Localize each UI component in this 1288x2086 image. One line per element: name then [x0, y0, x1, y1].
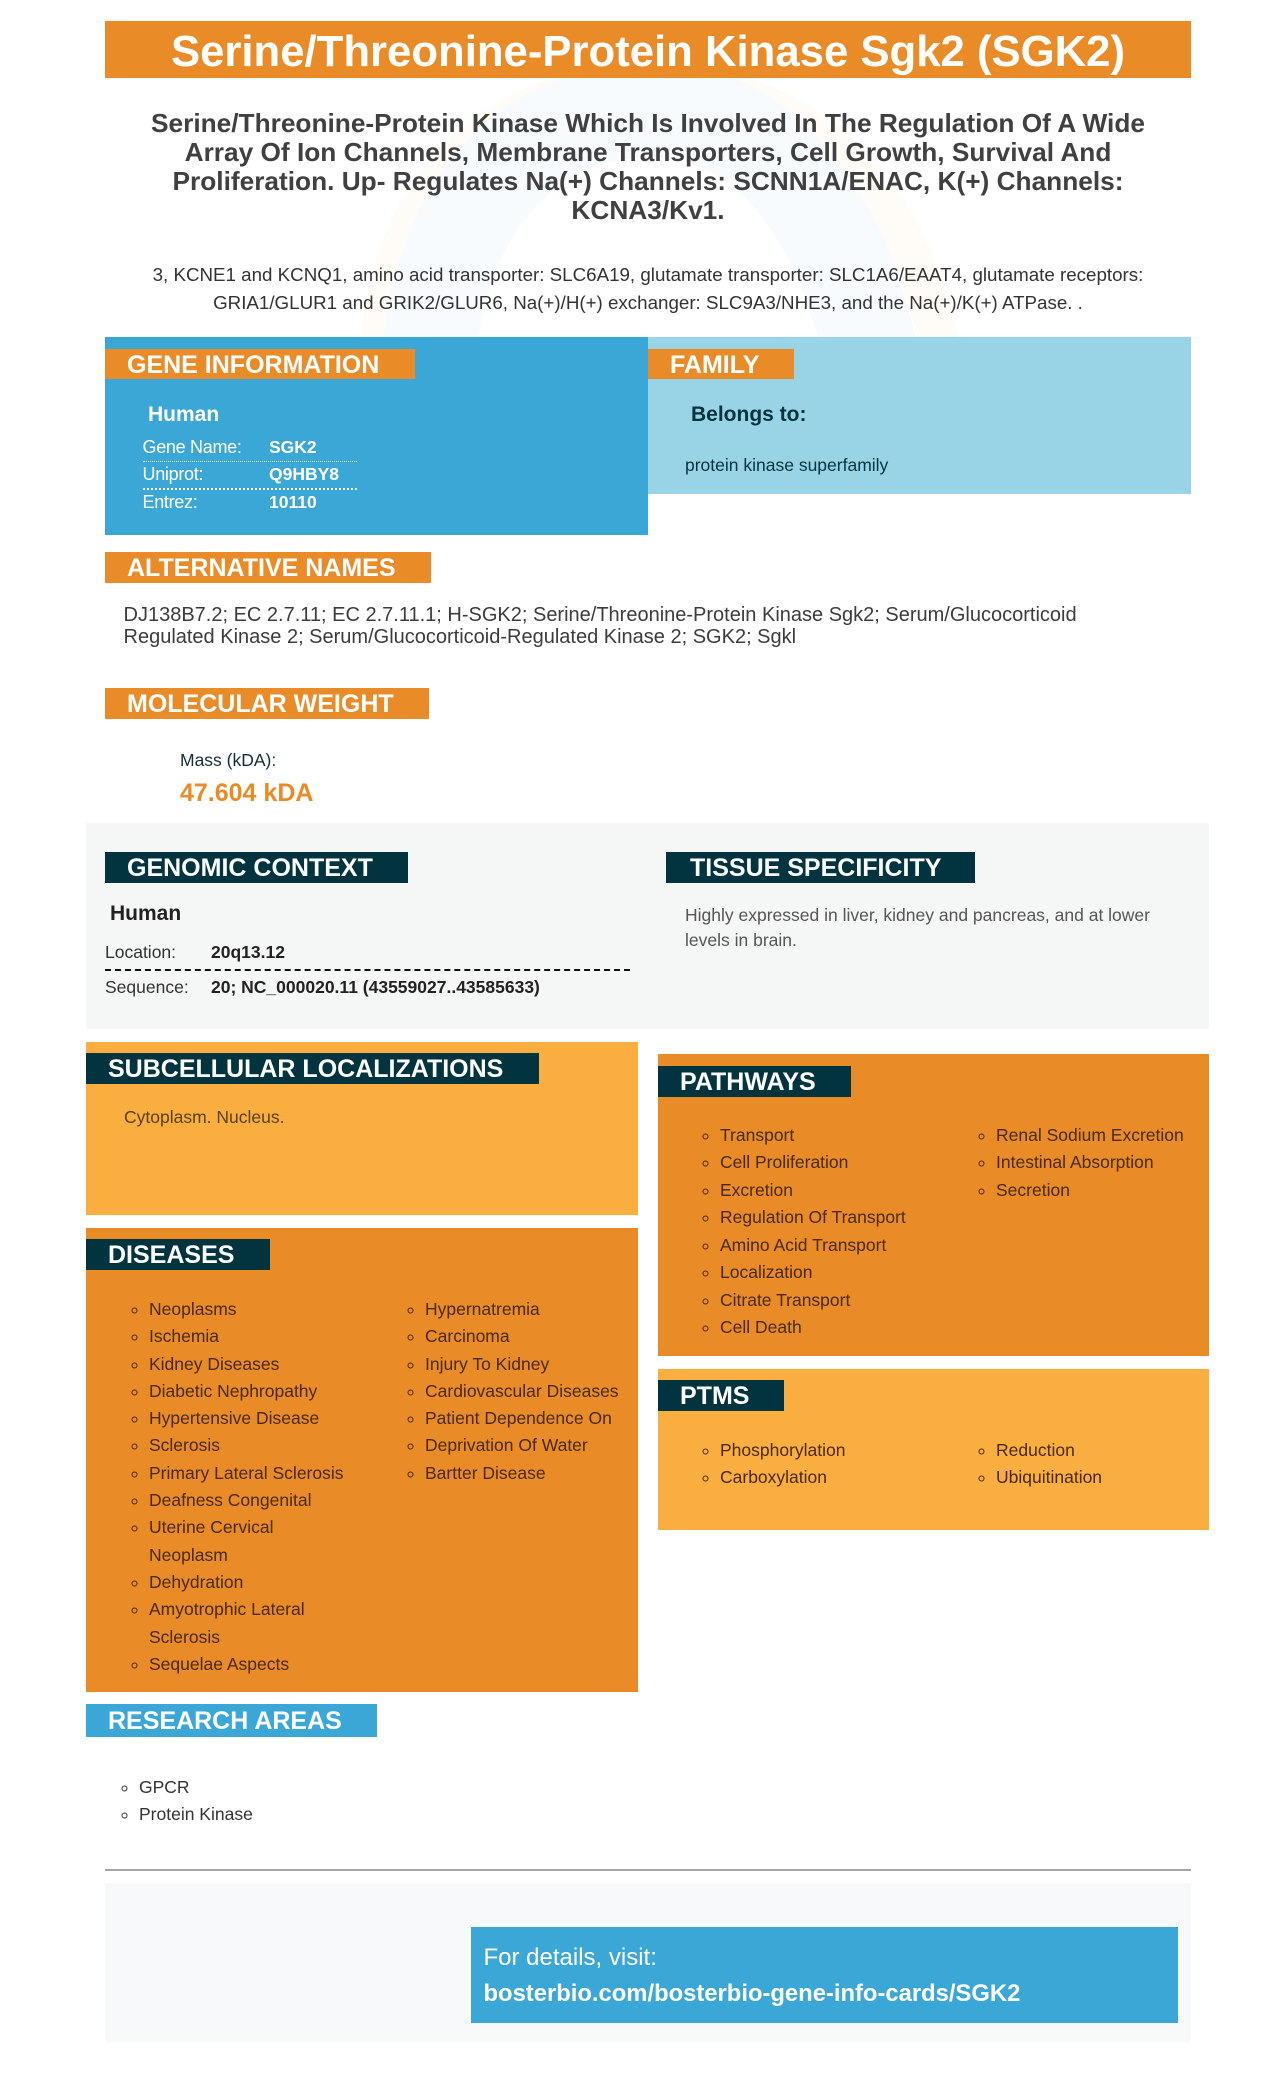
panel: subcellular localizations — [86, 1042, 638, 1215]
pathway list right: Renal Sodium Excretion — [996, 1124, 1184, 1144]
subtitle — [151, 108, 1145, 225]
watermark logo — [340, 70, 980, 350]
heading: alternative names: ALTERNATIVE NAMES — [127, 554, 396, 582]
description: 3, KCNE1 and KCNQ1, amino acid transporter: SLC6A19, glutamate transporter: SLC1A6/EAAT4, glutamate receptors: — [153, 264, 1143, 285]
gene table: SGK2 — [269, 437, 317, 457]
disease list right: Cardiovascular Diseases — [425, 1381, 619, 1401]
disease list right: Deprivation Of Water — [425, 1435, 588, 1455]
location row: Location: — [105, 942, 176, 962]
disease list right: Carcinoma — [425, 1326, 510, 1346]
panel: family — [648, 337, 1191, 494]
ptm list right: Reduction — [996, 1440, 1075, 1460]
alternative names text: DJ138B7.2; EC 2.7.11; EC 2.7.11.1; H-SGK2; Serine/Threonine-Protein Kinase Sgk2; Serum/Glucocorticoid — [124, 604, 1077, 626]
disease list left: Deafness Congenital — [149, 1490, 311, 1510]
disease list left: Sequelae Aspects — [149, 1654, 289, 1674]
ptm list left — [702, 1440, 846, 1487]
pathway list left: Regulation Of Transport — [720, 1207, 906, 1227]
disease list left: Dehydration — [149, 1572, 243, 1592]
alternative names text — [124, 604, 1077, 648]
pathway list right: Intestinal Absorption — [996, 1152, 1154, 1172]
pathway list left — [702, 1124, 906, 1337]
belongs to: Belongs to: — [691, 403, 806, 426]
subtitle: Array Of Ion Channels, Membrane Transporters, Cell Growth, Survival And — [185, 137, 1111, 167]
disease list right: Bartter Disease — [425, 1463, 546, 1483]
disease list left — [132, 1299, 344, 1674]
heading: tissue specificity: TISSUE SPECIFICITY — [690, 854, 941, 882]
panel: genomic context and tissue specificity: 20q13.12 — [211, 942, 285, 962]
alternative names text: Regulated Kinase 2; Serum/Glucocorticoid-Regulated Kinase 2; SGK2; Sgkl — [124, 626, 796, 648]
gene table: Uniprot: — [142, 464, 203, 484]
mass value: 47.604 kDA — [180, 778, 313, 806]
panel: ptms — [658, 1369, 1209, 1530]
panel: genomic context and tissue specificity — [86, 823, 1209, 1029]
title: Serine/Threonine-Protein Kinase Sgk2 (SGK2) — [171, 27, 1125, 76]
pathway list right — [978, 1124, 1184, 1200]
heading: research areas: RESEARCH AREAS — [108, 1707, 342, 1735]
heading: ptms: PTMS — [680, 1382, 749, 1410]
disease list right: Injury To Kidney — [425, 1354, 549, 1374]
heading: research areas — [86, 1704, 377, 1737]
disease list left: Kidney Diseases — [149, 1354, 279, 1374]
ptm list right: Ubiquitination — [996, 1467, 1102, 1487]
research areas list — [122, 1776, 253, 1824]
panel: genomic context and tissue specificity: 20; NC_000020.11 (43559027..43585633) — [211, 977, 540, 997]
subtitle: Proliferation. Up- Regulates Na(+) Channels: SCNN1A/ENAC, K(+) Channels: — [173, 166, 1123, 196]
disease list left: Sclerosis — [149, 1627, 220, 1647]
gene table: Q9HBY8 — [269, 464, 339, 484]
disease list left: Amyotrophic Lateral — [149, 1599, 305, 1619]
species: Human — [148, 403, 219, 426]
panel: gene information — [105, 337, 648, 535]
sequence row: Sequence: — [105, 977, 189, 997]
disease list left: Diabetic Nephropathy — [149, 1381, 317, 1401]
research areas list: Protein Kinase — [139, 1804, 253, 1824]
heading: diseases — [86, 1239, 270, 1270]
localization text: Cytoplasm. Nucleus. — [124, 1106, 284, 1126]
tissue text: Highly expressed in liver, kidney and pancreas, and at lower — [685, 905, 1150, 925]
family value: protein kinase superfamily — [685, 454, 888, 474]
disease list left: Uterine Cervical — [149, 1517, 273, 1537]
details label: For details, visit: — [484, 1944, 657, 1971]
ptm list right — [978, 1440, 1102, 1487]
pathway list left: Cell Death — [720, 1317, 802, 1337]
pathway list left: Transport — [720, 1124, 794, 1144]
heading: family: FAMILY — [670, 351, 759, 379]
pathway list left: Localization — [720, 1262, 812, 1282]
pathway list left: Amino Acid Transport — [720, 1234, 886, 1254]
research areas list: GPCR — [139, 1776, 190, 1796]
disease list left: Primary Lateral Sclerosis — [149, 1463, 344, 1483]
mass label: Mass (kDA): — [180, 750, 276, 770]
disease list left: Neoplasm — [149, 1545, 228, 1565]
heading: diseases: DISEASES — [108, 1241, 234, 1269]
heading: gene information: GENE INFORMATION — [127, 351, 379, 379]
pathway list left: Cell Proliferation — [720, 1152, 848, 1172]
pathway list left: Excretion — [720, 1180, 793, 1200]
disease list left: Hypertensive Disease — [149, 1408, 319, 1428]
gene table — [142, 437, 357, 512]
disease list left: Sclerosis — [149, 1435, 220, 1455]
heading: family — [648, 349, 794, 379]
gene table: 10110 — [269, 492, 317, 512]
disease list right — [408, 1299, 619, 1483]
disease list right: Patient Dependence On — [425, 1408, 612, 1428]
tissue text — [685, 905, 1150, 950]
gene table: Gene Name: — [142, 437, 242, 457]
heading: pathways: PATHWAYS — [680, 1068, 816, 1096]
footer panel — [105, 1883, 1191, 2042]
callout: details link — [471, 1927, 1178, 2023]
ptm list left: Phosphorylation — [720, 1440, 846, 1460]
details url: bosterbio.com/bosterbio-gene-info-cards/SGK2 — [484, 1980, 1020, 2007]
panel: diseases — [86, 1228, 638, 1692]
gene table: Entrez: — [142, 492, 197, 512]
pathway list left: Citrate Transport — [720, 1290, 850, 1310]
species: Human — [110, 902, 181, 925]
heading: pathways — [658, 1066, 851, 1097]
description — [153, 264, 1143, 313]
pathway list right: Secretion — [996, 1180, 1070, 1200]
heading: genomic context: GENOMIC CONTEXT — [127, 854, 373, 882]
heading: ptms — [658, 1380, 784, 1411]
description: GRIA1/GLUR1 and GRIK2/GLUR6, Na(+)/H(+) exchanger: SLC9A3/NHE3, and the Na(+)/K(+) ATPase. . — [213, 292, 1083, 313]
heading: subcellular localizations: SUBCELLULAR LOCALIZATIONS — [108, 1055, 503, 1083]
disease list right: Hypernatremia — [425, 1299, 540, 1319]
subtitle: Serine/Threonine-Protein Kinase Which Is Involved In The Regulation Of A Wide — [151, 108, 1145, 138]
tissue text: levels in brain. — [685, 930, 797, 950]
panel: pathways — [658, 1054, 1209, 1356]
subtitle: KCNA3/Kv1. — [571, 195, 725, 225]
disease list left: Neoplasms — [149, 1299, 237, 1319]
ptm list left: Carboxylation — [720, 1467, 827, 1487]
disease list left: Ischemia — [149, 1326, 219, 1346]
heading: molecular weight: MOLECULAR WEIGHT — [127, 690, 394, 718]
